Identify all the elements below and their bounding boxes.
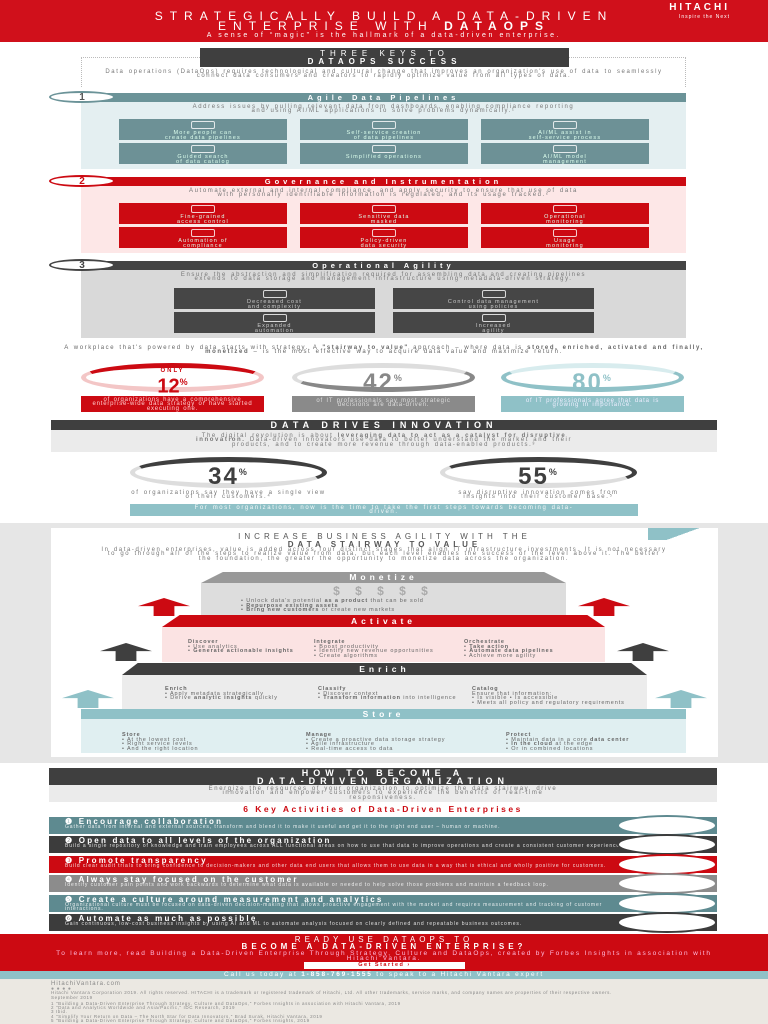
step: monetize: • Repurpose existing assets: [241, 603, 338, 609]
stat 80%: 80%: [572, 369, 613, 396]
step: store: • Maintain data in a core data center: [506, 737, 629, 743]
panel: operational agility: [81, 261, 686, 338]
step: activate: • Use analytics: [188, 644, 238, 650]
tiles: masked: [371, 218, 397, 224]
call bar: Call us today at 1-858-769-1555 to speak to a Hitachi Vantara expert: [224, 971, 544, 978]
footer: 2 "Data and Analytics Worldwide and Asia/Pacific," IDC Research, 2019: [51, 1005, 235, 1010]
footer: Hitachi Vantara Corporation 2019. All rights reserved. HITACHI is a trademark or registered trademark of Hitachi, Ltd. All other trademarks, service marks, and company names are properties of their respective owners.: [51, 990, 612, 995]
tiles: Control data management: [448, 299, 539, 305]
panel: governance: [81, 177, 686, 253]
tiles: agility: [482, 328, 505, 334]
panel: agile data pipelines: [81, 93, 686, 169]
footer: 5 "Building a Data-Driven Enterprise Through Strategy, Culture and DataOps," Forbes Insights, 2019: [51, 1018, 310, 1023]
tiles: self-service process: [529, 134, 601, 140]
tiles: management: [543, 158, 587, 164]
tiles: access control: [177, 218, 229, 224]
stat 80%: [501, 363, 684, 412]
tiles: monitoring: [546, 242, 584, 248]
step: store: • Or in combined locations: [506, 746, 593, 752]
arrows: [62, 598, 707, 708]
activity rows: Organizational culture must be focused on data-driven decision-making that allows proactive engagement with the market and requires measurement and tracking of customer interactions.: [65, 902, 602, 912]
tiles: Policy-driven: [360, 238, 408, 244]
panel: stairway to value: [0, 523, 768, 763]
button: Get Started ›: [358, 962, 411, 968]
stat 12%: [81, 363, 264, 412]
stat 42%: of IT professionals say most strategic decisions are data-driven.: [316, 398, 451, 408]
stairway intro text: A workplace that's powered by data starts with strategy. A "stairway to value" approach – where data is stored, enriched, activated and finally, monetized – is the most effective way to acquire data value and maximize return.: [64, 345, 704, 355]
step: enrich: [122, 663, 647, 709]
step: store: [81, 709, 686, 753]
text: Address issues by pulling relevant data from dashboards, enabling compliance reporting and using AI/ML applications to solve problems dynamically.¹: [193, 104, 574, 114]
CTA banner: READY USE DATAOPS TO: [295, 935, 473, 944]
how to text: [49, 785, 717, 802]
step: store: Protect: [506, 732, 531, 738]
tiles: compliance: [183, 242, 223, 248]
logo: [669, 2, 730, 20]
data drives innovation heading: [51, 420, 717, 430]
step: enrich: • Transform information into intelligence: [318, 695, 456, 701]
innovation text: [51, 430, 717, 452]
step: store: • Create a proactive data storage strategy: [306, 737, 445, 743]
step: activate: • Automate data pipelines: [464, 648, 554, 654]
activity rows: ❺ Create a culture around measurement and analytics: [65, 895, 384, 904]
activity rows: Build clear audit trials to bring confidence to decision-makers and other data end users that allows them to use data in a way that is ethical and wholly positive for customers.: [65, 863, 606, 869]
footer: [0, 979, 768, 1024]
step: monetize: Monetize: [349, 572, 418, 582]
tiles: [119, 119, 649, 164]
tiles: create data pipelines: [165, 134, 241, 140]
teal callout: [130, 504, 638, 516]
text: Automate external and internal compliance, and apply security to ensure that use of data with personally identifiable information is regulated, and its usage tracked.²: [189, 188, 578, 198]
title: INCREASE BUSINESS AGILITY WITH THE: [238, 532, 531, 541]
step: store: • Real-time access to data: [306, 746, 393, 752]
step: activate: • Take action: [464, 644, 509, 650]
step: store: • Right service levels: [122, 741, 193, 747]
tiles: Expanded: [257, 323, 292, 329]
stat 55%: say disruptive innovation comes from insights into their customer base.⁵: [458, 490, 619, 500]
how to become heading: HOW TO BECOME A: [302, 768, 464, 778]
tiles: using policies: [469, 304, 518, 310]
badge 1: [49, 91, 115, 103]
title: [155, 9, 613, 33]
step: enrich: • Apply metadata strategically: [165, 691, 264, 697]
step: activate: • Identify new revenue opportunities: [314, 648, 434, 654]
tiles: More people can: [174, 130, 232, 136]
tiles: Guided search: [177, 154, 229, 160]
footer: 4 "Simplify Your Return on Data – The North Star for Data Innovators," Brad Surak, Hitachi Vantara, 2019: [51, 1014, 323, 1019]
step: activate: Activate: [351, 616, 416, 626]
header: [81, 177, 686, 186]
stat 12%: ONLY: [160, 368, 185, 374]
step: enrich: Enrich: [165, 686, 188, 692]
step: enrich: • Is visible • Is accessible: [472, 695, 558, 701]
step: monetize: • Unlock data's potential as a product that can be sold: [241, 598, 424, 604]
step: enrich: Ensure that information:: [472, 691, 552, 697]
title: DATA STAIRWAY TO VALUE: [288, 540, 481, 549]
paragraph: In data-driven enterprises, value is added across four distinct stages that align IT infrastructure investments. It is not necessary to go through all of the steps to realize value from data, but each level enables the success of the level above it. The better the foundation, the greater the opportunity to monetize data across the organization.: [101, 547, 667, 562]
activity rows: ❶ Encourage collaboration: [65, 817, 223, 826]
activity rows: [49, 815, 717, 933]
activity rows: Build a single repository of knowledge and train employees across ALL functional areas on how to use that data to improve operations and create a consistent customer experience.: [65, 843, 622, 849]
step: monetize: [201, 572, 566, 615]
badge 1: 1: [79, 92, 85, 103]
step: activate: Discover: [188, 639, 218, 645]
tiles: [174, 288, 594, 334]
footer: September 2019: [51, 995, 93, 1000]
title: ENTERPRISE WITH DATAOPS: [218, 19, 550, 33]
step: enrich: Classify: [318, 686, 346, 692]
tiles: Operational: [544, 214, 586, 220]
footer: ● ● ● ●: [51, 986, 71, 992]
stat 80%: of IT professionals agree that data is growing in importance.: [526, 398, 659, 408]
stat 34%: 34%: [208, 463, 249, 490]
badge 3: 3: [79, 260, 85, 271]
step: activate: Integrate: [314, 639, 345, 645]
step: activate: • Generate actionable insights: [188, 648, 294, 654]
CTA banner: To learn more, read Building a Data-Driven Enterprise Through Strategy, Culture and DataOps, created by Forbes Insights in association with Hitachi Vantara.: [56, 950, 712, 962]
step: store: Manage: [306, 732, 332, 738]
header: Agile Data Pipelines: [308, 93, 459, 102]
6 key activities title: 6 Key Activities of Data-Driven Enterprises: [243, 804, 523, 814]
tiles: Decreased cost: [247, 299, 302, 305]
step: enrich: Enrich: [359, 664, 410, 674]
tiles: and complexity: [248, 304, 301, 310]
tiles: Automation of: [178, 238, 228, 244]
three keys heading: [200, 48, 569, 67]
teal callout: For most organizations, now is the time to take the first steps towards becoming data-driven.: [195, 505, 573, 515]
tiles: [119, 203, 649, 248]
footer: 1 "Building a Data-Driven Enterprise Through Strategy, Culture and DataOps," Forbes Insights in association with Hitachi Vantara, 2019: [51, 1001, 401, 1006]
tiles: Self-service creation: [346, 130, 422, 136]
step: activate: • Boost productivity: [314, 644, 379, 650]
tiles: data security: [361, 242, 407, 248]
stat 42%: [292, 363, 475, 412]
badge 2: [49, 175, 115, 187]
call bar: [0, 971, 768, 979]
CTA banner: BECOME A DATA-DRIVEN ENTERPRISE?: [242, 942, 526, 951]
step: store: • In the cloud at the edge: [506, 741, 593, 747]
step: monetize: $ $ $ $ $: [333, 584, 434, 598]
header: Governance and Instrumentation: [265, 177, 502, 186]
step: activate: Orchestrate: [464, 639, 505, 645]
tiles: Increased: [476, 323, 511, 329]
innovation text: The digital revolution is about leveraging data to act as a catalyst for disruptive innovation. Data-driven innovators use data to better understand the market and their products, and to create more revenue through data-enabled products.³: [196, 433, 572, 448]
step: enrich: • Derive analytic insights quickly: [165, 695, 278, 701]
three keys heading: DATAOPS SUCCESS: [308, 57, 461, 66]
step: store: • Agile infrastructure: [306, 741, 375, 747]
stat 55%: [440, 457, 637, 500]
tiles: Usage: [554, 238, 576, 244]
data drives innovation heading: DATA DRIVES INNOVATION: [270, 420, 498, 430]
step: activate: • Create algorithms: [314, 653, 378, 659]
stat 55%: 55%: [518, 463, 559, 490]
CTA banner: [0, 934, 768, 971]
step: enrich: • Discover context: [318, 691, 378, 697]
badge 3: [49, 259, 115, 271]
activity rows: Identify customer pain points and work backwards to determine what data is available or needed to help solve those problems and maintain a feedback loop.: [65, 882, 549, 888]
header: Operational Agility: [312, 261, 455, 270]
stat 34%: [130, 457, 327, 500]
tiles: Fine-grained: [180, 214, 226, 220]
tiles: of data catalog: [176, 158, 230, 164]
title: [238, 532, 531, 549]
activity rows: ❷ Open data to all levels of the organization: [65, 836, 332, 845]
stat 12%: of organizations have a comprehensive enterprise-wide data strategy or have started executing one.: [92, 397, 253, 412]
step: monetize: • Bring new customers or create new markets: [241, 607, 395, 613]
step: enrich: • Meets all policy and regulatory requirements: [472, 700, 625, 706]
how to text: Energize the resources of your organization to optimize the data stairway, drive innovation and empower customers to experience the benefits of real-time responsiveness.: [209, 786, 557, 801]
badge 2: 2: [79, 176, 85, 187]
activity rows: Gain continuous, low-cost business insights by using AI and ML to automate analysis focused on clearly defined and repeatable business outcomes.: [65, 921, 522, 927]
footer: 3 Ibid.: [51, 1009, 67, 1014]
three keys heading: THREE KEYS TO: [320, 49, 449, 58]
text: Ensure the abstraction and simplification required for assembling data and creating pipelines extends to data storage and management infrastructure using metadata-driven strategy.: [181, 272, 586, 282]
subtitle: A sense of “magic” is the hallmark of a data-driven enterprise.: [207, 32, 561, 39]
tiles: Simplified operations: [346, 154, 422, 160]
step: enrich: Catalog: [472, 686, 498, 692]
footer: HitachiVantara.com: [51, 981, 121, 987]
tiles: AI/ML model: [543, 154, 587, 160]
step: store: • At the lowest cost: [122, 737, 186, 743]
step: activate: [162, 615, 605, 662]
tiles: AI/ML assist in: [538, 130, 592, 136]
tiles: automation: [255, 328, 294, 334]
step: activate: • Achieve more agility: [464, 653, 536, 659]
tiles: of data pipelines: [354, 134, 414, 140]
how to become heading: DATA-DRIVEN ORGANIZATION: [257, 776, 509, 786]
tiles: Sensitive data: [358, 214, 410, 220]
stat 42%: 42%: [363, 369, 404, 396]
step: store: Store: [122, 732, 141, 738]
intro text: Data operations (DataOps) requires technological and cultural change that improves an organization's use of data to seamlessly connect data consumers and creators to rapidly optimize value from all types of data.: [105, 69, 663, 79]
stat 12%: 12%: [157, 376, 188, 398]
stat 34%: of organizations say they have a single view of their customers.⁴: [131, 490, 326, 500]
step: store: Store: [363, 709, 404, 719]
header: [81, 261, 686, 270]
activity rows: ❹ Always stay focused on the customer: [65, 875, 299, 884]
activity rows: ❻ Automate as much as possible: [65, 914, 257, 923]
tiles: monitoring: [546, 218, 584, 224]
header: [81, 93, 686, 102]
dotted frame intro: [81, 57, 686, 87]
title: STRATEGICALLY BUILD A DATA-DRIVEN: [155, 9, 613, 23]
how to become heading: [49, 768, 717, 785]
button: [304, 962, 465, 969]
logo: HITACHI: [669, 2, 730, 13]
step: store: • And the right location: [122, 746, 198, 752]
logo: Inspire the Next: [679, 14, 730, 20]
activity rows: ❸ Promote transparency: [65, 856, 208, 865]
activity rows: Gather data from internal and external sources, transform and blend it to make it useful and get it to the right end user – human or machine.: [65, 824, 500, 830]
header banner: [0, 0, 768, 42]
